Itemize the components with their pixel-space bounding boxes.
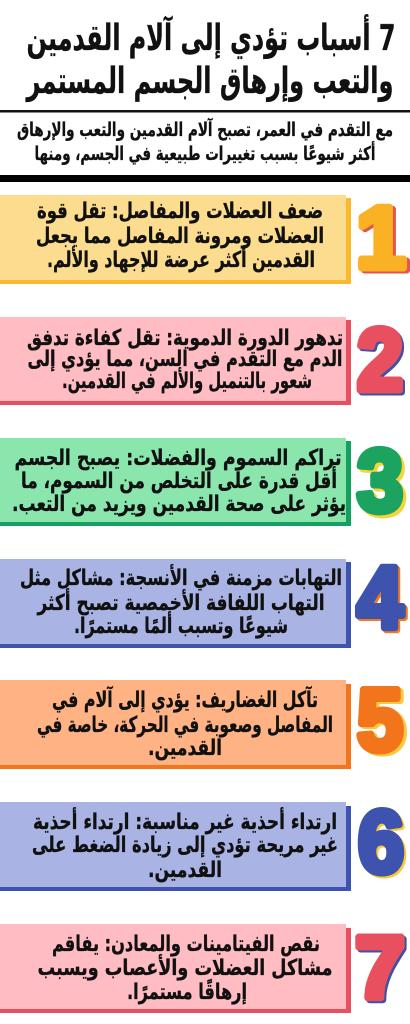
- text 7: مشاكل العضلات والأعصاب ويسبب: [38, 953, 332, 981]
- text 1: ضعف العضلات والمفاصل: تقل قوة: [37, 199, 323, 224]
- number 6: 6: [358, 792, 404, 891]
- number 2: 2: [357, 310, 403, 409]
- number 4: 4: [357, 548, 403, 647]
- text 5: القدمين.: [148, 736, 222, 761]
- text 4: شيوعًا وتسبب ألمًا مستمرًا.: [74, 610, 288, 639]
- number 3: 3: [357, 431, 403, 530]
- text 7: [38, 932, 332, 1005]
- text 4: [20, 563, 342, 639]
- text 2: [27, 326, 343, 394]
- card 3: [0, 438, 351, 526]
- bottom thick rule: [0, 175, 410, 182]
- intro text: [17, 117, 393, 165]
- number 2: 2: [359, 312, 405, 411]
- card 2: [0, 317, 351, 405]
- panel: cause 4: [0, 548, 405, 649]
- panel: cause 3: [0, 431, 406, 533]
- text 4: التهاب اللفافة الأخمصية تصبح أكثر: [37, 587, 324, 616]
- number 1: 1: [359, 190, 409, 289]
- number 1: 1: [356, 188, 406, 287]
- text 5: [37, 685, 333, 761]
- panel: cause 2: [0, 310, 405, 411]
- text 7: نقص الفيتامينات والمعادن: يفاقم: [52, 932, 320, 957]
- panel: cause 7: [0, 918, 407, 1019]
- title: [25, 14, 396, 102]
- text 6: القدمين.: [148, 858, 222, 883]
- number 4: 4: [359, 550, 405, 649]
- card 5: [0, 680, 351, 769]
- card 1: [0, 195, 351, 284]
- top rule: [0, 110, 410, 112]
- card 4: [0, 559, 351, 648]
- text 1: القدمين أكثر عرضة للإجهاد والألم.: [47, 244, 315, 273]
- card 6: [0, 802, 351, 891]
- text 3: [12, 446, 346, 517]
- text 7: إرهاقًا مستمرًا.: [127, 978, 247, 1005]
- panel: cause 6: [0, 792, 406, 893]
- number 3: 3: [360, 434, 406, 533]
- text 1: [36, 199, 324, 273]
- card 7: [0, 924, 351, 1013]
- number 6: 6: [360, 794, 406, 893]
- number 5: 5: [357, 670, 403, 769]
- number 5: 5: [360, 672, 406, 771]
- panel: cause 5: [0, 670, 406, 771]
- text 6: [32, 806, 338, 883]
- panel: cause 1: [0, 188, 409, 289]
- number 7: 7: [357, 920, 407, 1019]
- text 1: العضلات ومرونة المفاصل مما يجعل: [36, 224, 324, 249]
- number 7: 7: [355, 918, 405, 1017]
